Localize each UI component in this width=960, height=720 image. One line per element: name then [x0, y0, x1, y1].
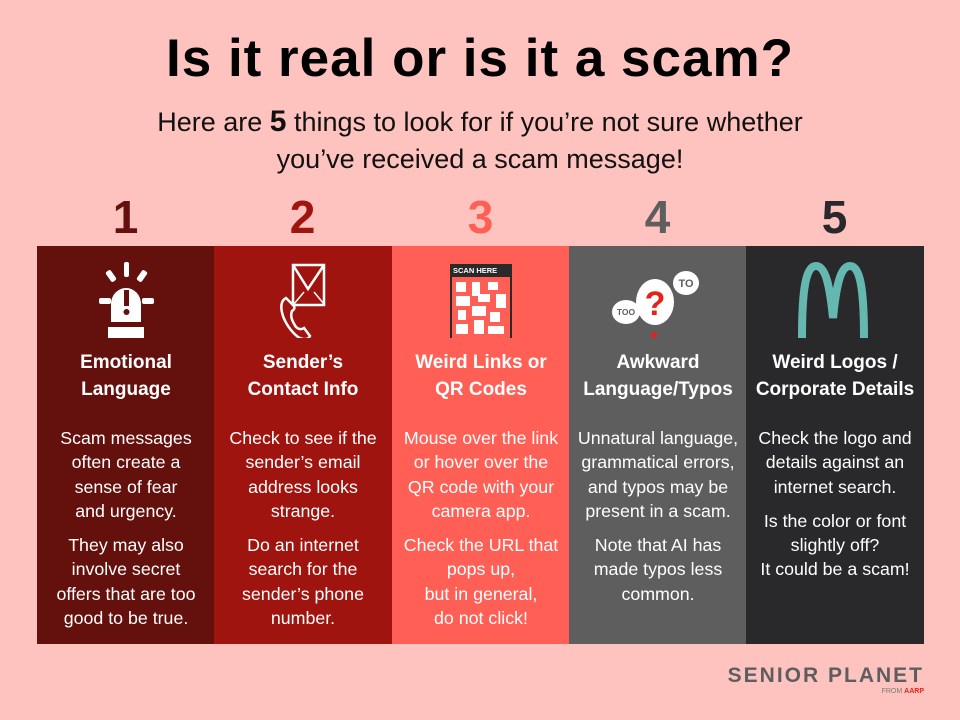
text	[56, 428, 196, 628]
logo: senior planet: FROM AARP	[882, 688, 924, 695]
text: Note that AI has	[595, 535, 721, 555]
panel: emotional language	[37, 246, 215, 644]
heading	[583, 352, 733, 400]
text: sender’s phone	[242, 584, 364, 604]
heading: Contact Info	[248, 379, 358, 400]
text: do not click!	[434, 608, 528, 628]
panel: weird logos	[746, 246, 924, 644]
text: strange.	[271, 501, 335, 521]
text: Mouse over the link	[404, 428, 558, 448]
text: address looks	[248, 477, 358, 497]
heading: Sender’s	[263, 352, 343, 373]
panel: awkward language	[569, 246, 747, 644]
text: Do an internet	[247, 535, 359, 555]
text: number.	[271, 608, 335, 628]
heading	[756, 352, 914, 400]
panel: sender contact info	[214, 246, 392, 644]
text: Check the logo and	[758, 428, 912, 448]
heading: QR Codes	[435, 379, 527, 400]
text: internet search.	[774, 477, 896, 497]
panel: weird links	[392, 246, 570, 644]
icon: speech bubbles: TOO	[617, 307, 636, 317]
text: sender’s email	[246, 452, 360, 472]
text: and urgency.	[75, 501, 177, 521]
text: grammatical errors,	[581, 452, 735, 472]
heading	[80, 352, 172, 400]
number 2: 2	[290, 191, 315, 243]
heading	[415, 352, 547, 400]
text	[578, 428, 738, 604]
text: Unnatural language,	[578, 428, 738, 448]
text: offers that are too	[56, 584, 196, 604]
text: They may also	[68, 535, 184, 555]
icon: speech bubbles: ?	[645, 285, 665, 323]
heading: Weird Links or	[415, 352, 547, 373]
text: Is the color or font	[764, 511, 906, 531]
number 3: 3	[468, 191, 493, 243]
subtitle: you’ve received a scam message!	[277, 144, 683, 174]
text: QR code with your	[408, 477, 554, 497]
text: It could be a scam!	[760, 559, 910, 579]
text: involve secret	[72, 559, 180, 579]
text: pops up,	[447, 559, 515, 579]
heading: Emotional	[80, 352, 172, 373]
text: Scam messages	[60, 428, 192, 448]
text: search for the	[249, 559, 357, 579]
heading: Weird Logos /	[772, 352, 898, 373]
title: Is it real or is it a scam?	[166, 29, 794, 88]
text: common.	[621, 584, 695, 604]
text	[404, 428, 558, 628]
logo: senior planet: SENIOR PLANET	[728, 664, 924, 687]
heading	[248, 352, 358, 400]
text: or hover over the	[414, 452, 548, 472]
icon: QR code: SCAN HERE	[453, 266, 497, 275]
subtitle: Here are 5 things to look for if you’re not sure whether	[157, 105, 803, 138]
icon: speech bubbles	[612, 271, 699, 338]
heading: Language	[81, 379, 171, 400]
heading: Language/Typos	[583, 379, 733, 400]
text: good to be true.	[64, 608, 188, 628]
text	[758, 428, 912, 579]
number 5: 5	[822, 191, 847, 243]
heading: Awkward	[616, 352, 700, 373]
text: present in a scam.	[585, 501, 731, 521]
text: Check the URL that	[404, 535, 558, 555]
icon: arches logo	[798, 262, 868, 338]
text: slightly off?	[791, 535, 879, 555]
icon: speech bubbles: TO	[678, 278, 694, 290]
text: but in general,	[425, 584, 537, 604]
subtitle	[157, 105, 803, 174]
text: Check to see if the	[229, 428, 377, 448]
number 1: 1	[113, 191, 138, 243]
heading: Corporate Details	[756, 379, 914, 400]
text: details against an	[766, 452, 904, 472]
number 4: 4	[645, 191, 670, 243]
text: camera app.	[432, 501, 530, 521]
text: made typos less	[594, 559, 722, 579]
icon: envelope phone	[280, 264, 326, 338]
text	[229, 428, 377, 628]
icon: QR code	[450, 264, 512, 338]
text: and typos may be	[588, 477, 728, 497]
text: often create a	[72, 452, 180, 472]
text: sense of fear	[75, 477, 177, 497]
icon: alarm	[99, 262, 154, 338]
